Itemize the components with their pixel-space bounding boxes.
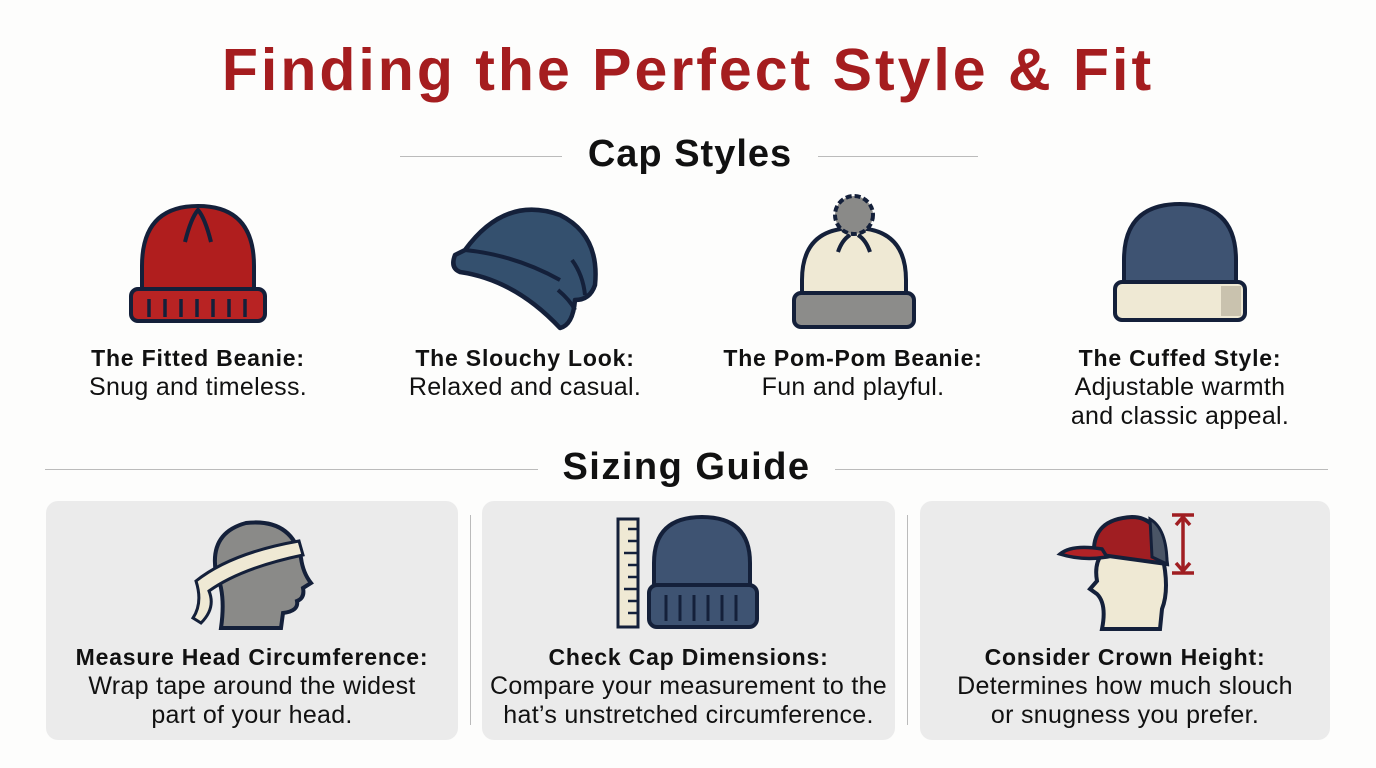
panel: cap dimensions (482, 501, 895, 740)
text (76, 644, 428, 729)
text: slouchy look: The Slouchy Look: (415, 345, 635, 371)
heading: cap styles: Cap Styles (588, 133, 792, 175)
text: pom-pom: The Pom-Pom Beanie: (723, 345, 983, 371)
text: Wrap tape around the widest (88, 672, 416, 700)
text: or snugness you prefer. (991, 701, 1259, 729)
text: slouchy look: Relaxed and casual. (409, 373, 641, 401)
text: Determines how much slouch (957, 672, 1293, 700)
text: Check Cap Dimensions: (548, 644, 829, 670)
panel: crown height (920, 501, 1330, 740)
heading: sizing guide: Sizing Guide (562, 446, 811, 488)
text: cuffed (1071, 345, 1289, 430)
icon: head with tape (191, 520, 314, 630)
text: fitted beanie: Snug and timeless. (89, 373, 307, 401)
icon: slouchy beanie (451, 207, 598, 330)
title: Finding the Perfect Style & Fit (222, 37, 1154, 103)
text: fitted beanie: The Fitted Beanie: (91, 345, 305, 371)
icon: head with cap and arrow (1056, 513, 1194, 631)
icon: fitted beanie (129, 204, 267, 323)
icon: pom-pom beanie (792, 194, 916, 329)
text: slouchy look (409, 345, 641, 401)
text (957, 644, 1293, 729)
text: pom-pom: Fun and playful. (762, 373, 944, 401)
text: cuffed: and classic appeal. (1071, 402, 1289, 430)
text: Compare your measurement to the (490, 672, 887, 700)
text: Measure Head Circumference: (76, 644, 428, 670)
text: pom-pom (723, 345, 983, 401)
text: part of your head. (151, 701, 353, 729)
text: cuffed: Adjustable warmth (1075, 373, 1285, 401)
panel: measure head (46, 501, 458, 740)
icon: ruler and beanie (616, 515, 759, 629)
icon: cuffed beanie (1113, 202, 1247, 322)
text: fitted beanie (89, 345, 307, 401)
text (490, 644, 887, 729)
text: hat’s unstretched circumference. (503, 701, 874, 729)
text: Consider Crown Height: (985, 644, 1265, 670)
text: cuffed: The Cuffed Style: (1079, 345, 1281, 371)
